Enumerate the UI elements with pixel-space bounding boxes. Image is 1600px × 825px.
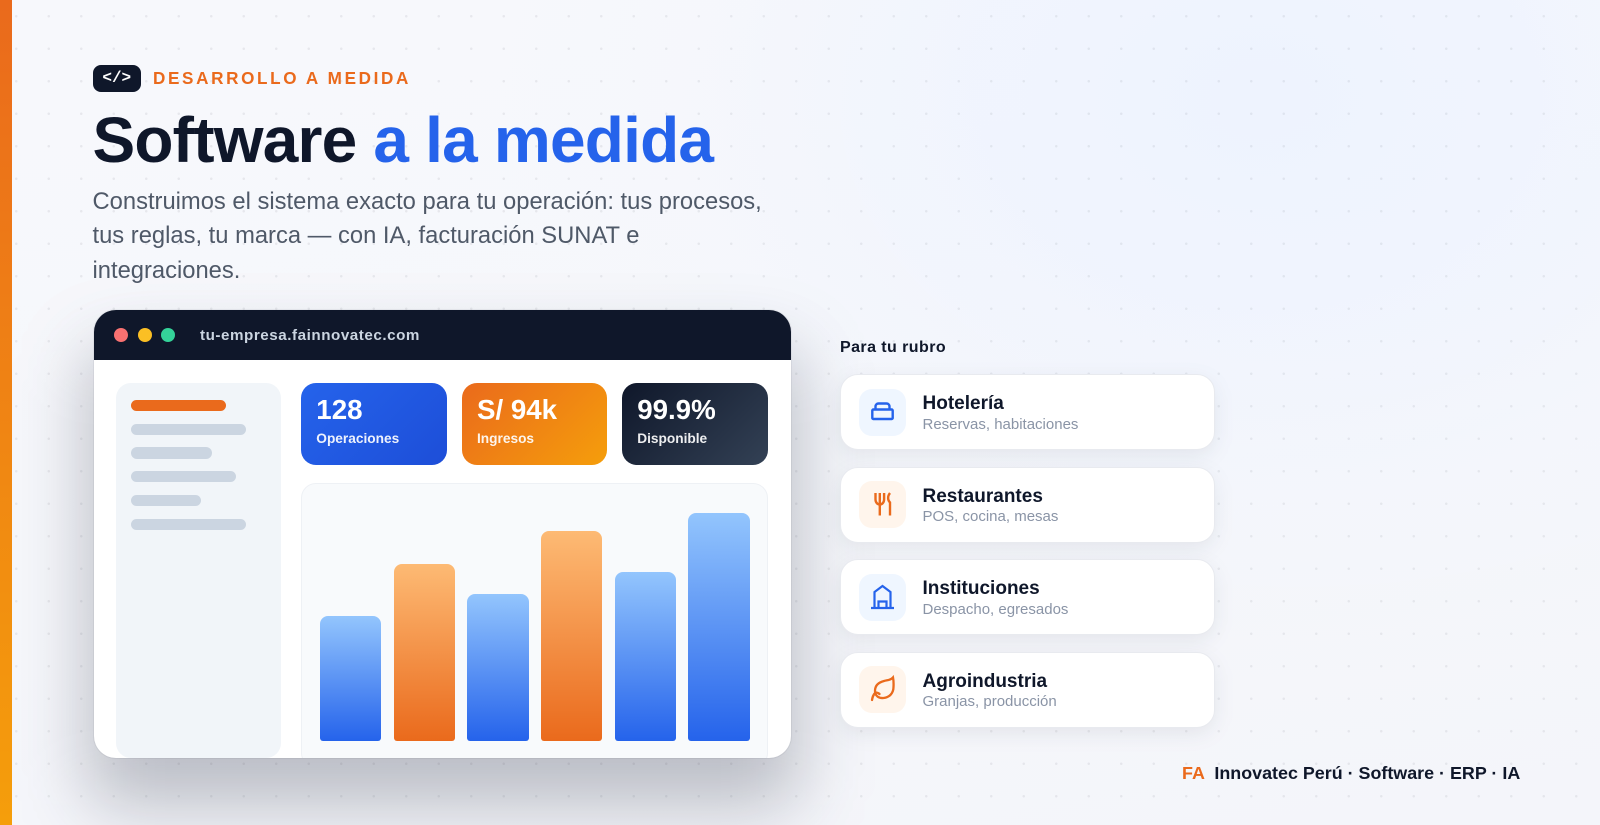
bar 1 [320,616,381,741]
stat label: Disponible [637,431,707,446]
card: agroindustria [840,652,1215,728]
card: restaurantes [840,466,1215,542]
card subtitle: Reservas, habitaciones [922,416,1078,432]
subtitle: integraciones. [92,257,240,284]
card subtitle: Granjas, producción [922,693,1057,710]
eyebrow badge: code icon [92,65,141,92]
subtitle: Construimos el sistema exacto para tu operación: tus procesos, [92,188,762,215]
window shadow [88,350,798,805]
bar 6 [688,513,750,741]
stat card: operaciones [301,383,447,465]
card title: Instituciones [922,578,1040,599]
bar 3 [467,594,529,741]
subtitle [92,188,762,284]
left accent bar [0,0,12,825]
window dot: green [161,328,175,342]
footer brand: FA Innovatec Perú · Software · ERP · IA [1182,763,1520,783]
sidebar item [131,519,246,530]
stat card: ingresos [462,383,607,465]
panel: browser mockup [94,310,791,758]
sidebar item [131,471,236,482]
icon: building [858,574,906,620]
stat value: 128 [316,394,362,425]
section heading: Para tu rubro [840,338,946,356]
card subtitle: POS, cocina, mesas [922,508,1058,525]
title: Software a la medida [92,104,713,176]
card title: Agroindustria [922,670,1047,692]
subtitle: tus reglas, tu marca — con IA, facturación SUNAT e [92,222,639,249]
stat value: S/ 94k [477,394,557,425]
icon: cutlery [858,481,906,528]
stat card: disponible [622,383,768,465]
sidebar item [131,424,246,435]
eyebrow badge: code icon: </> [102,69,131,87]
card: hoteleria [840,374,1215,450]
bar 4 [541,531,602,741]
card title: Hotelería [922,393,1004,414]
stat label: Operaciones [316,431,399,446]
window dot: yellow [138,328,152,342]
stat label: Ingresos [477,431,534,446]
eyebrow label: DESARROLLO A MEDIDA [153,69,411,88]
url: tu-empresa.fainnovatec.com [200,326,420,344]
bar 5 [615,572,676,741]
card title: Restaurantes [922,486,1043,506]
sidebar item [131,495,201,506]
sidebar item: active [131,400,226,411]
window dot: red [114,328,128,342]
icon: bed [858,388,906,436]
browser title bar [94,310,791,360]
stat value: 99.9% [637,394,716,425]
card: instituciones [840,559,1215,635]
bar 2 [394,564,455,741]
sidebar item [131,447,212,459]
icon: leaf [858,666,906,713]
sidebar [116,383,281,758]
card subtitle: Despacho, egresados [922,600,1068,618]
bar chart [301,483,768,768]
